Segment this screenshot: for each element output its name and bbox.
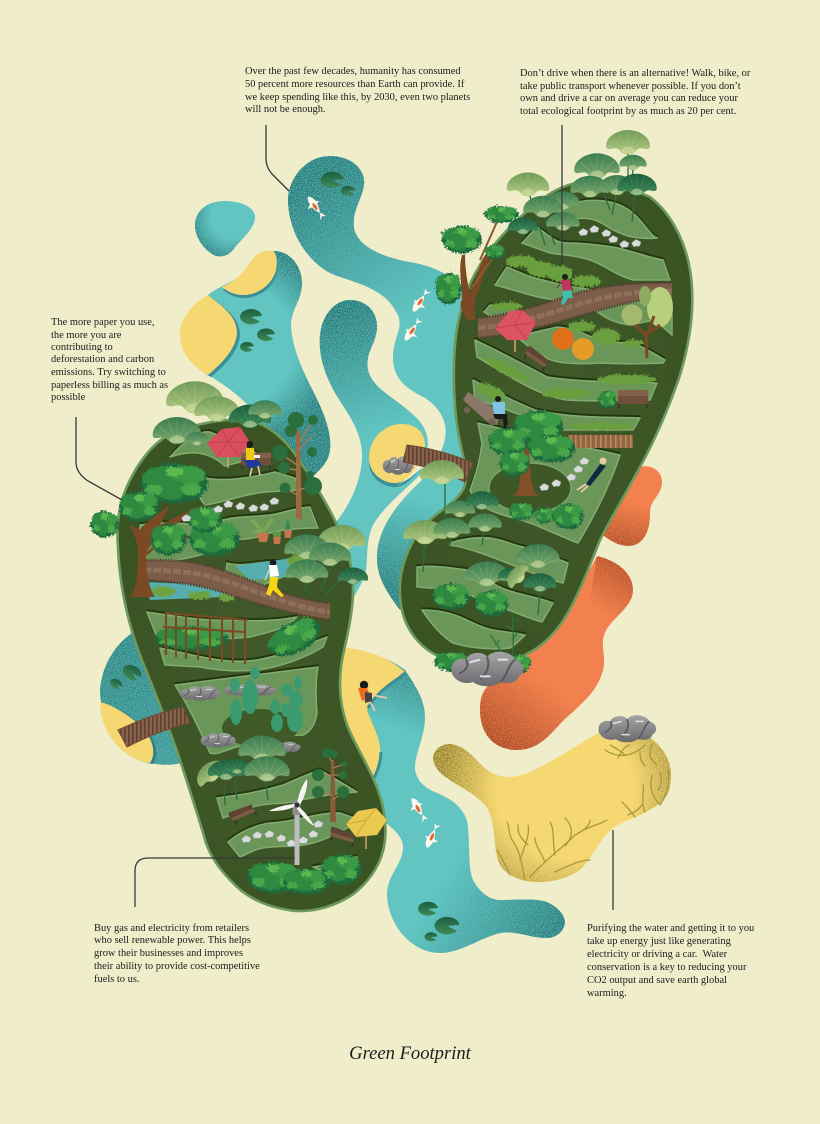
right strip of water beside the foot — [377, 430, 470, 610]
upper river with lily pads and koi — [288, 156, 470, 440]
stepping stones lower left — [242, 820, 323, 847]
yellow blob with coral — [433, 729, 671, 882]
crate bed — [568, 435, 633, 448]
text: resources: 50 percent more resources than Earth can provide. If — [245, 79, 465, 90]
koi upper river — [302, 193, 434, 345]
left foot base — [118, 420, 386, 911]
left bottom rocks — [180, 684, 301, 753]
callout line: resources — [266, 125, 289, 191]
text: water: Purifying the water and getting it to you — [587, 923, 755, 934]
pumpkin shrubs — [552, 328, 594, 360]
lily pads lake — [240, 309, 275, 352]
text: resources: we keep spending like this, by 2030, even two planets — [245, 92, 470, 103]
ferns — [490, 615, 519, 660]
text: water: electricity or driving a car. Water — [587, 949, 728, 960]
text: paper: contributing to — [51, 342, 113, 353]
sand bank top — [222, 251, 277, 295]
lily pads lower — [418, 902, 460, 941]
right footprint garden — [400, 130, 692, 686]
left lake with sand banks and lily pads — [180, 251, 330, 475]
cacti — [230, 667, 303, 732]
centre right leaf cluster — [403, 460, 560, 615]
text: energy: their ability to provide cost-competitive — [94, 961, 260, 972]
swimmer on sand — [358, 681, 387, 711]
callout line: water — [612, 830, 614, 910]
right foot terraces — [417, 200, 672, 649]
potted plants — [250, 518, 292, 544]
coral right — [622, 770, 669, 817]
title: Green Footprint — [349, 1043, 472, 1064]
text: paper: emissions. Try switching to — [51, 367, 166, 378]
orange blob large — [480, 556, 633, 750]
hedges by tree — [508, 501, 582, 528]
left wooden bridge — [143, 560, 330, 620]
left big tree — [89, 462, 238, 597]
text: water: conservation is a key to reducing your — [587, 962, 747, 973]
text: water: CO2 output and save earth global — [587, 975, 727, 986]
person walking on bridge — [557, 274, 573, 305]
central stream — [320, 300, 428, 600]
text: transport: Don’t drive when there is an alternative! Walk, bike, or — [520, 68, 751, 79]
lower left bush — [153, 610, 325, 662]
lying woman — [577, 458, 606, 492]
dark hollow in lower terrace — [222, 709, 298, 747]
bottom hedge — [246, 853, 360, 893]
bench lower right — [331, 826, 355, 846]
text: energy: who sell renewable power. This helps — [94, 935, 251, 946]
sand bottom left — [100, 702, 153, 763]
text: energy: Buy gas and electricity from retailers — [94, 923, 249, 934]
lily pads upper river — [321, 172, 355, 196]
trellis — [163, 613, 248, 664]
text: resources: Over the past few decades, humanity has consumed — [245, 66, 461, 77]
coral top — [605, 744, 657, 766]
cream path overlap — [396, 448, 425, 486]
sand bank left — [180, 295, 237, 375]
coral bottom — [497, 818, 607, 880]
text: transport: take public transport whenever possible. If you don’t — [520, 81, 741, 92]
top left leaf cluster — [153, 381, 282, 445]
centre rock — [383, 456, 414, 475]
light shrubs right foot — [474, 254, 655, 429]
left foot terraces — [140, 432, 360, 873]
right wooden bridge — [478, 283, 672, 338]
dark oval under tree — [489, 463, 571, 513]
red umbrella left — [207, 427, 250, 468]
round tree left foot — [272, 412, 322, 520]
yellow umbrella — [346, 808, 387, 849]
light tree — [622, 286, 673, 358]
right centre tree — [487, 409, 574, 496]
text: energy: grow their businesses and improves — [94, 948, 243, 959]
side left leaf cluster — [284, 525, 368, 595]
text: paper: the more you are — [51, 330, 122, 341]
stepping stones right lower — [540, 457, 589, 491]
bench right — [522, 345, 552, 372]
leaf over centre bridge — [420, 460, 464, 484]
text: water: warming. — [587, 988, 627, 999]
bench lower left — [227, 798, 259, 829]
stepping stones upper left — [182, 497, 279, 522]
text: energy: fuels to us. — [94, 974, 140, 985]
left wood bridge over pond — [118, 707, 190, 747]
woman in white walking — [265, 560, 284, 597]
sand lower — [335, 647, 405, 777]
rock on yellow blob — [598, 715, 656, 742]
callout line: transport — [561, 125, 563, 264]
small pond — [195, 201, 255, 256]
sand rim lower — [368, 673, 405, 778]
lower river with sand, lily pads and koi — [335, 647, 565, 953]
text: water: take up energy just like generating — [587, 936, 732, 947]
right foot base — [400, 182, 692, 663]
right top tree — [434, 204, 517, 321]
callout line: paper — [76, 417, 122, 500]
koi lower — [405, 795, 445, 851]
foot rocks — [451, 652, 523, 686]
text: transport: total ecological footprint by as much as 20 per cent. — [520, 106, 736, 117]
bottom left pond — [100, 633, 185, 765]
water under left bridge — [145, 558, 300, 600]
lower left leaf cluster — [191, 736, 290, 805]
hedges bottom right foot — [431, 582, 530, 671]
callout line: energy — [135, 858, 295, 907]
top right leaf cluster — [507, 130, 657, 245]
wind turbine — [269, 779, 314, 865]
stepping stones upper right — [578, 225, 641, 248]
sand island — [369, 424, 425, 483]
text: paper: The more paper you use, — [51, 317, 154, 328]
small round tree lower left — [312, 748, 349, 822]
bench and planter right — [597, 389, 648, 408]
sand with rock and bridge centre — [369, 424, 425, 487]
lily pads bottom left — [108, 662, 144, 691]
red umbrella right — [495, 310, 536, 352]
text: paper: possible — [51, 392, 86, 403]
seated man on bench — [463, 392, 508, 428]
text: resources: will not be enough. — [245, 104, 326, 115]
text: transport: own and drive a car on average you can reduce your — [520, 93, 738, 104]
orange blob small — [603, 466, 662, 546]
text: paper: deforestation and carbon — [51, 354, 155, 365]
text: paper: paperless billing as much as — [51, 380, 168, 391]
tree foliage — [89, 462, 238, 555]
bench with reading woman — [241, 441, 271, 476]
left footprint garden — [89, 381, 387, 911]
centre bridge — [403, 445, 473, 482]
light shrubs left foot — [150, 553, 304, 600]
